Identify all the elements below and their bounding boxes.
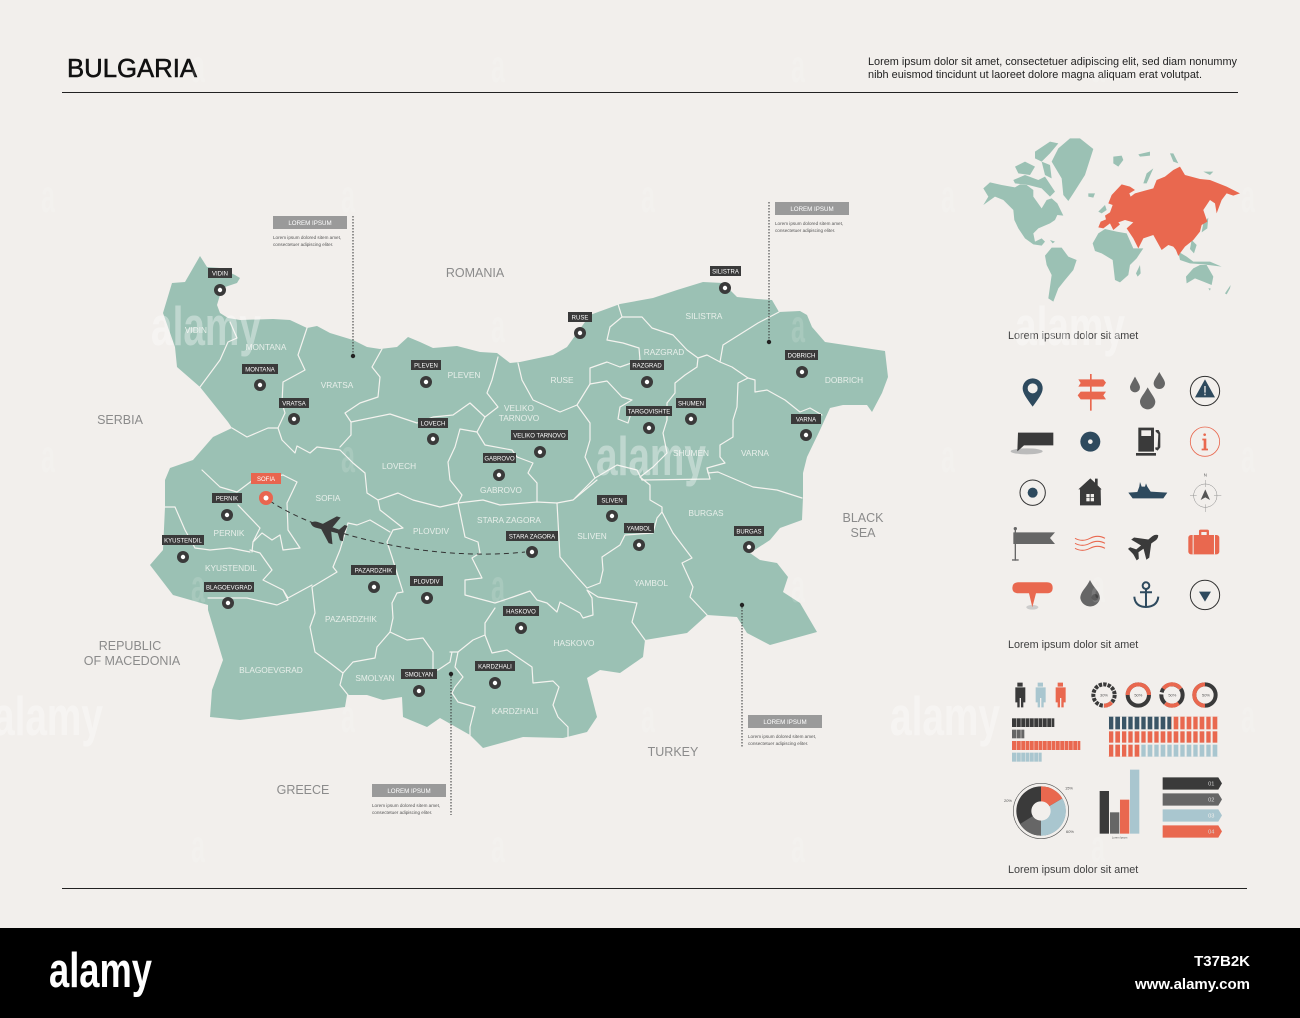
region labels: PLEVEN [448, 370, 480, 380]
footer logo: alamy [49, 944, 152, 998]
region labels: TARNOVO [499, 413, 540, 423]
city: Targovishte [626, 406, 672, 434]
callout: south: Lorem ipsum dolored sitem amet, [372, 803, 440, 808]
bar chart: Lorem Ipsum [1112, 836, 1128, 840]
city markers [162, 266, 821, 697]
icon: disc [1080, 432, 1100, 452]
icon: speech flag [1011, 433, 1053, 454]
city: Targovishte: TARGOVISHTE [628, 410, 670, 416]
city: Sliven [597, 495, 627, 522]
city: Dobrich [785, 350, 818, 378]
watermarks: alamy [890, 685, 1000, 747]
neighbouring country labels: ROMANIA [446, 266, 505, 280]
watermarks: alamy [596, 425, 706, 487]
region labels: SMOLYAN [355, 673, 395, 683]
region labels: KYUSTENDIL [205, 563, 257, 573]
callout: south [372, 672, 453, 815]
city: Shumen: SHUMEN [678, 402, 704, 408]
title: BULGARIA [67, 55, 197, 83]
region labels: YAMBOL [634, 578, 668, 588]
city: Blagoevgrad: BLAGOEVGRAD [206, 586, 253, 592]
icon: drops [1130, 372, 1165, 409]
callout: south-east: consectetuer adipiscing eliter. [748, 741, 808, 746]
icon set caption: Lorem ipsum dolor sit amet [1008, 639, 1138, 651]
watermarks: alamy [151, 295, 261, 357]
neighbouring country labels: REPUBLIC [99, 639, 161, 653]
neighbouring country labels: TURKEY [648, 745, 699, 759]
red Eurasia [1098, 167, 1240, 256]
region labels: GABROVO [480, 485, 523, 495]
city: Burgas: BURGAS [736, 530, 762, 536]
watermarks: a [791, 560, 805, 612]
city: Plovdiv: PLOVDIV [413, 580, 440, 586]
watermarks: a [1241, 690, 1255, 742]
city: Silistra: SILISTRA [712, 270, 739, 276]
region labels: RAZGRAD [644, 347, 684, 357]
watermarks: a [941, 170, 955, 222]
city: Kardzhali: KARDZHALI [478, 664, 512, 670]
watermarks [0, 40, 1255, 872]
watermarks: a [791, 820, 805, 872]
callout: north-east: LOREM IPSUM [790, 206, 834, 213]
callout: north-east [767, 202, 849, 344]
city: Haskovo: HASKOVO [506, 610, 536, 616]
people pictogram rows [1108, 717, 1219, 757]
city: Varna [791, 414, 821, 441]
watermarks: a [41, 430, 55, 482]
region labels: PAZARDZHIK [325, 614, 377, 624]
region labels: MONTANA [246, 342, 287, 352]
city: Ruse [568, 312, 592, 339]
pie chart: 60% [1066, 829, 1074, 834]
callout: north-west: LOREM IPSUM [288, 220, 332, 227]
city: Kyustendil [162, 535, 204, 563]
icon: ship [1128, 482, 1167, 498]
callout: south-east [740, 603, 822, 747]
city: Lovech: LOVECH [421, 422, 445, 428]
watermarks: alamy [1015, 295, 1125, 357]
region labels: SHUMEN [673, 448, 709, 458]
numbered arrows: 04 [1208, 830, 1214, 836]
region labels: KARDZHALI [492, 706, 538, 716]
city: Pleven [411, 360, 441, 388]
watermarks: a [191, 40, 205, 92]
region borders [165, 304, 822, 737]
watermarks: a [491, 560, 505, 612]
region labels: LOVECH [382, 461, 416, 471]
icon: three people [1015, 683, 1066, 707]
infographic caption: Lorem ipsum dolor sit amet [1008, 864, 1138, 876]
pie chart: 15% [1065, 785, 1073, 790]
city: Razgrad [630, 360, 664, 388]
watermarks: a [941, 430, 955, 482]
neighbouring country labels [84, 266, 884, 797]
infographic set [1004, 683, 1222, 840]
region labels: RUSE [550, 375, 574, 385]
neighbouring country labels: BLACK [842, 511, 884, 525]
icon: waves [1075, 536, 1105, 550]
watermarks: a [1091, 40, 1105, 92]
city: Yambol: YAMBOL [627, 526, 652, 532]
icon: plane [1125, 525, 1166, 565]
world map [983, 138, 1240, 302]
icon: info [1190, 427, 1220, 456]
watermarks: a [191, 820, 205, 872]
watermarks: a [791, 40, 805, 92]
city: Yambol [624, 523, 654, 551]
numbered arrows: 01 [1208, 782, 1214, 788]
tally bars [1012, 718, 1080, 762]
region labels: SLIVEN [577, 531, 607, 541]
watermarks: a [641, 690, 655, 742]
city: Vidin [208, 268, 232, 296]
donut percentages [1100, 692, 1210, 697]
city: Blagoevgrad [204, 582, 254, 609]
flight route [270, 501, 525, 554]
icon set [1011, 372, 1221, 610]
region labels: STARA ZAGORA [477, 515, 541, 525]
icon: house [1078, 478, 1102, 505]
city: Pazardzhik: PAZARDZHIK [355, 568, 392, 574]
numbered arrows: 03 [1208, 814, 1214, 820]
city: Gabrovo: GABROVO [484, 456, 515, 462]
city: Shumen [676, 398, 706, 425]
watermarks: a [491, 40, 505, 92]
city: Razgrad: RAZGRAD [632, 364, 662, 370]
donut percentages: 50% [1134, 692, 1143, 697]
city: Pernik: PERNIK [216, 496, 238, 502]
icon: down arrow [1190, 580, 1220, 610]
intro text [868, 56, 1238, 81]
region labels: VELIKO [504, 403, 535, 413]
watermarks: a [1091, 820, 1105, 872]
website: www.alamy.com [1134, 976, 1250, 993]
neighbouring country labels: SEA [850, 526, 876, 540]
neighbouring country labels: GREECE [277, 783, 329, 797]
capital: Sofia [251, 473, 281, 505]
donut charts [1093, 684, 1216, 706]
watermarks: a [491, 300, 505, 352]
city: Stara Zagora [506, 531, 558, 558]
city: Silistra [710, 266, 741, 294]
region labels: DOBRICH [825, 375, 863, 385]
city: Pazardzhik [351, 565, 396, 593]
world map caption: Lorem ipsum dolor sit amet [1008, 330, 1138, 342]
region labels: PERNIK [214, 528, 245, 538]
neighbouring country labels: OF MACEDONIA [84, 654, 181, 668]
region labels: VARNA [741, 448, 769, 458]
green continents [983, 138, 1231, 302]
callout: south-east: LOREM IPSUM [763, 719, 807, 726]
callout: north-west: consectetuer adipiscing eliter. [273, 242, 333, 247]
callout: north-east: Lorem ipsum dolored sitem amet, [775, 221, 843, 226]
watermarks: a [1241, 430, 1255, 482]
intro text: Lorem ipsum dolor sit amet, consectetuer adipiscing elit, sed diam nonummy [868, 56, 1238, 68]
callout: north-west: Lorem ipsum dolored sitem amet, [273, 235, 341, 240]
map: Bulgaria [150, 256, 888, 748]
region labels: VIDIN [185, 325, 207, 335]
watermarks: a [491, 820, 505, 872]
city: Ruse: RUSE [572, 316, 588, 322]
intro text: nibh euismod tincidunt ut laoreet dolore magna aliquam erat volutpat. [868, 69, 1202, 81]
donut percentages: 50% [1168, 692, 1177, 697]
bar chart [1100, 770, 1139, 840]
city: Dobrich: DOBRICH [788, 354, 815, 360]
icon: oil drop [1080, 580, 1100, 606]
city: Kyustendil: KYUSTENDIL [164, 538, 202, 544]
watermarks: a [341, 170, 355, 222]
region labels: BLAGOEVGRAD [239, 665, 303, 675]
city: Lovech [418, 418, 448, 445]
icon: fuel pump [1136, 428, 1160, 456]
region labels: SOFIA [316, 493, 341, 503]
watermarks: a [341, 690, 355, 742]
country outline [150, 256, 888, 748]
region labels: HASKOVO [553, 638, 595, 648]
city: Stara Zagora: STARA ZAGORA [509, 534, 555, 540]
numbered arrows: 02 [1208, 798, 1214, 804]
region labels: BURGAS [688, 508, 724, 518]
city: Pernik [212, 493, 242, 521]
city: Veliko Tarnovo: VELIKO TARNOVO [513, 434, 566, 440]
watermarks: a [641, 170, 655, 222]
icon: signpost [1078, 374, 1106, 411]
icon: anchor [1134, 582, 1158, 607]
city: Veliko Tarnovo [511, 430, 568, 458]
city: Smolyan [401, 669, 437, 697]
pie chart [1004, 783, 1074, 839]
city: Haskovo [503, 606, 539, 634]
icon: compass [1190, 472, 1221, 512]
city: Plovdiv [410, 576, 443, 604]
city: Varna: VARNA [796, 418, 816, 424]
watermarks: a [791, 300, 805, 352]
watermarks: a [191, 560, 205, 612]
footer bar [0, 928, 1300, 1018]
callout: south: consectetuer adipiscing eliter. [372, 810, 432, 815]
callout: north-east: consectetuer adipiscing eliter. [775, 228, 835, 233]
capital: Sofia: SOFIA [257, 477, 275, 483]
icon: location pin [1023, 378, 1043, 407]
region labels [185, 311, 863, 716]
icon: flag [1012, 527, 1055, 561]
icon: compass: N [1204, 472, 1207, 477]
image id: T37B2K [1194, 953, 1250, 970]
icon: target [1020, 480, 1045, 505]
city: Vratsa [279, 398, 309, 425]
city: Vratsa: VRATSA [282, 402, 306, 408]
city: Kardzhali [475, 661, 515, 689]
city: Smolyan: SMOLYAN [405, 672, 433, 678]
pie chart: 20% [1004, 798, 1012, 803]
donut percentages: 30% [1100, 692, 1108, 697]
icon: suitcase [1188, 530, 1219, 554]
icon: warning [1190, 376, 1220, 406]
city: Gabrovo [483, 453, 516, 481]
watermarks: a [1241, 170, 1255, 222]
city: Pleven: PLEVEN [414, 364, 438, 370]
watermarks: a [1091, 560, 1105, 612]
region labels: SILISTRA [686, 311, 723, 321]
callout: south-east: Lorem ipsum dolored sitem amet, [748, 734, 816, 739]
donut percentages: 50% [1202, 692, 1210, 697]
numbered arrows [1163, 777, 1222, 838]
city: Burgas [734, 526, 764, 553]
icon: red marker [1012, 582, 1053, 610]
region labels: VRATSA [321, 380, 354, 390]
city: Montana: MONTANA [245, 368, 275, 374]
city: Montana [242, 364, 278, 391]
watermarks: a [341, 430, 355, 482]
callout: north-west [273, 216, 355, 358]
watermarks: a [41, 170, 55, 222]
region labels: PLOVDIV [413, 526, 449, 536]
city: Vidin: VIDIN [212, 272, 228, 278]
neighbouring country labels: SERBIA [97, 413, 144, 427]
city: Sliven: SLIVEN [601, 498, 623, 504]
callout: south: LOREM IPSUM [387, 788, 431, 795]
icon: plane [307, 510, 349, 547]
